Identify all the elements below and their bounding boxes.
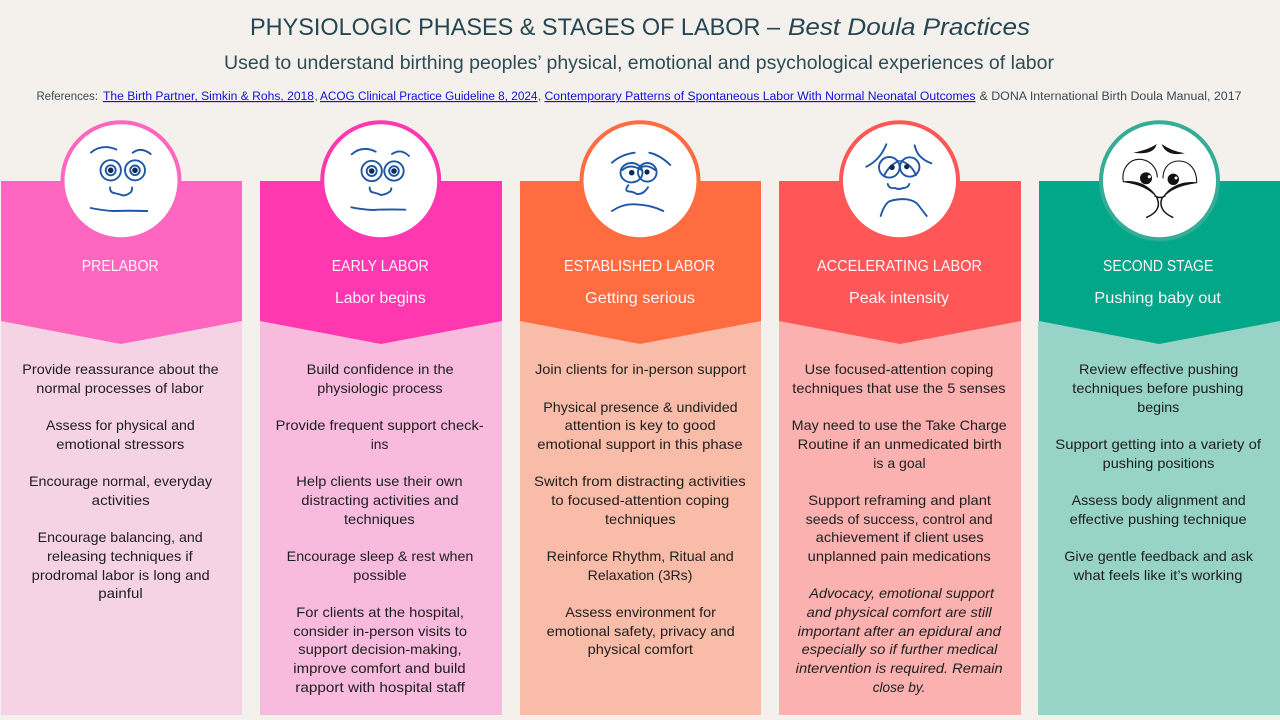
subtitle: Used to understand birthing peoples’ physical, emotional and psychological experiences of labor: [224, 53, 1055, 74]
subheading: pushing baby out: Pushing baby out: [1094, 290, 1222, 307]
text block: advocacy note: important after an epidural and: [798, 623, 1002, 639]
text block: second stage practices: pushing positions: [1103, 455, 1214, 471]
references line: ACOG Clinical Practice Guideline 8, 2024: [320, 91, 538, 103]
heading: prelabor: PRELABOR: [82, 258, 159, 275]
title: PHYSIOLOGIC PHASES & STAGES OF LABOR –: [250, 14, 781, 41]
references line: ,: [538, 91, 541, 103]
text block: advocacy note: Advocacy, emotional support: [808, 585, 995, 601]
text block: early labor practices: rapport with hospital staff: [295, 679, 465, 695]
text block: early labor practices: Provide frequent support check-: [276, 417, 484, 433]
title: [250, 14, 1030, 41]
text block: early labor practices: [276, 361, 484, 695]
text block: accelerating labor practices: achievement if client uses: [816, 529, 984, 545]
icon: distressed face: [841, 122, 958, 239]
text block: established labor practices: Assess environment for: [565, 604, 716, 620]
subheading: labor begins: Labor begins: [335, 290, 426, 307]
text block: prelabor practices: [22, 361, 219, 601]
header: established labor: [520, 181, 761, 344]
text block: established labor practices: to focused-attention coping: [551, 492, 729, 508]
text block: prelabor practices: Encourage normal, everyday: [29, 473, 212, 489]
panel: accelerating labor: [779, 122, 1021, 715]
text block: prelabor practices: prodromal labor is long and: [32, 567, 210, 583]
text block: early labor practices: For clients at the hospital,: [296, 604, 464, 620]
heading: second stage: SECOND STAGE: [1103, 258, 1213, 275]
text block: early labor practices: improve comfort and build: [293, 660, 466, 676]
text block: advocacy note: close by.: [873, 679, 925, 695]
text block: advocacy note: intervention is required. Remain: [796, 660, 1003, 676]
text block: accelerating labor practices: Use focused-attention coping: [805, 361, 993, 377]
text block: early labor practices: possible: [353, 567, 407, 583]
text block: accelerating labor practices: [792, 361, 1007, 564]
text block: early labor practices: support decision-making,: [298, 641, 462, 657]
header: accelerating labor: [779, 181, 1021, 344]
text block: early labor practices: techniques: [344, 511, 415, 527]
references line: The Birth Partner, Simkin & Rohs, 2018: [103, 91, 314, 103]
text block: established labor practices: attention is key to good: [565, 417, 716, 433]
subheading: getting serious: Getting serious: [585, 290, 695, 307]
panel: early labor: [260, 122, 502, 715]
references line: [36, 91, 1242, 103]
text block: prelabor practices: Assess for physical and: [46, 417, 195, 433]
heading: accelerating labor: ACCELERATING LABOR: [817, 258, 982, 275]
text block: second stage practices: Assess body alignment and: [1072, 492, 1246, 508]
panel: established labor: [520, 122, 761, 715]
text block: established labor practices: physical comfort: [588, 641, 693, 657]
heading: established labor: ESTABLISHED LABOR: [564, 258, 715, 275]
text block: early labor practices: Help clients use their own: [296, 473, 463, 489]
text block: second stage practices: effective pushing technique: [1070, 511, 1247, 527]
icon: calm face: [62, 122, 180, 239]
header: prelabor: [1, 181, 242, 344]
icon: alert face: [322, 122, 439, 239]
panel: second stage: [1038, 122, 1280, 715]
text block: established labor practices: techniques: [605, 511, 676, 527]
text block: early labor practices: distracting activities and: [301, 492, 459, 508]
text block: prelabor practices: Provide reassurance about the: [22, 361, 219, 377]
text block: established labor practices: [534, 361, 746, 657]
text block: second stage practices: Give gentle feedback and ask: [1064, 548, 1254, 564]
icon: worried face: [582, 122, 698, 239]
references line: ,: [314, 91, 318, 103]
text block: prelabor practices: activities: [92, 492, 150, 508]
text block: accelerating labor practices: is a goal: [873, 455, 926, 471]
panel: prelabor: [1, 122, 242, 715]
text block: established labor practices: Relaxation (3Rs): [588, 567, 692, 583]
text block: early labor practices: consider in-person visits to: [293, 623, 467, 639]
text block: second stage practices: what feels like it’s working: [1073, 567, 1242, 583]
references line: Contemporary Patterns of Spontaneous Labor With Normal Neonatal Outcomes: [544, 91, 976, 103]
text block: second stage practices: Review effective pushing: [1079, 361, 1238, 377]
text block: accelerating labor practices: Support reframing and plant: [808, 492, 991, 508]
header: early labor: [260, 181, 502, 344]
icon: pushing face: [1101, 122, 1218, 239]
text block: second stage practices: techniques before pushing: [1072, 380, 1243, 396]
text block: prelabor practices: releasing techniques if: [47, 548, 193, 564]
heading: early labor: EARLY LABOR: [332, 258, 429, 275]
references line: References:: [36, 91, 98, 103]
text block: established labor practices: Physical presence & undivided: [543, 399, 738, 415]
text block: established labor practices: Reinforce Rhythm, Ritual and: [547, 548, 734, 564]
text block: early labor practices: Build confidence in the: [307, 361, 454, 377]
text block: accelerating labor practices: May need to use the Take Charge: [792, 417, 1007, 433]
text block: prelabor practices: Encourage balancing, and: [38, 529, 203, 545]
header: second stage: [1039, 181, 1280, 344]
text block: second stage practices: [1055, 361, 1261, 583]
text block: advocacy note: especially so if further medical: [802, 641, 998, 657]
text block: prelabor practices: painful: [98, 585, 143, 601]
text block: early labor practices: Encourage sleep & rest when: [287, 548, 473, 564]
text block: second stage practices: begins: [1137, 399, 1179, 415]
text block: established labor practices: emotional support in this phase: [537, 436, 743, 452]
text block: advocacy note: and physical comfort are still: [807, 604, 993, 620]
subheading: peak intensity: Peak intensity: [849, 290, 949, 307]
text block: accelerating labor practices: Routine if an unmedicated birth: [798, 436, 1002, 452]
text block: advocacy note: [796, 585, 1003, 695]
text block: established labor practices: Switch from distracting activities: [534, 473, 746, 489]
text block: accelerating labor practices: seeds of success, control and: [806, 511, 993, 527]
text block: early labor practices: ins: [371, 436, 388, 452]
text block: prelabor practices: emotional stressors: [56, 436, 184, 452]
text block: accelerating labor practices: unplanned pain medications: [808, 548, 991, 564]
text block: established labor practices: Join clients for in-person support: [535, 361, 746, 377]
text block: second stage practices: Support getting into a variety of: [1055, 436, 1261, 452]
text block: accelerating labor practices: techniques that use the 5 senses: [792, 380, 1006, 396]
references line: & DONA International Birth Doula Manual, 2017: [980, 91, 1242, 103]
title: Best Doula Practices: [788, 14, 1030, 41]
text block: early labor practices: physiologic process: [317, 380, 443, 396]
text block: established labor practices: emotional safety, privacy and: [547, 623, 735, 639]
text block: prelabor practices: normal processes of labor: [36, 380, 204, 396]
